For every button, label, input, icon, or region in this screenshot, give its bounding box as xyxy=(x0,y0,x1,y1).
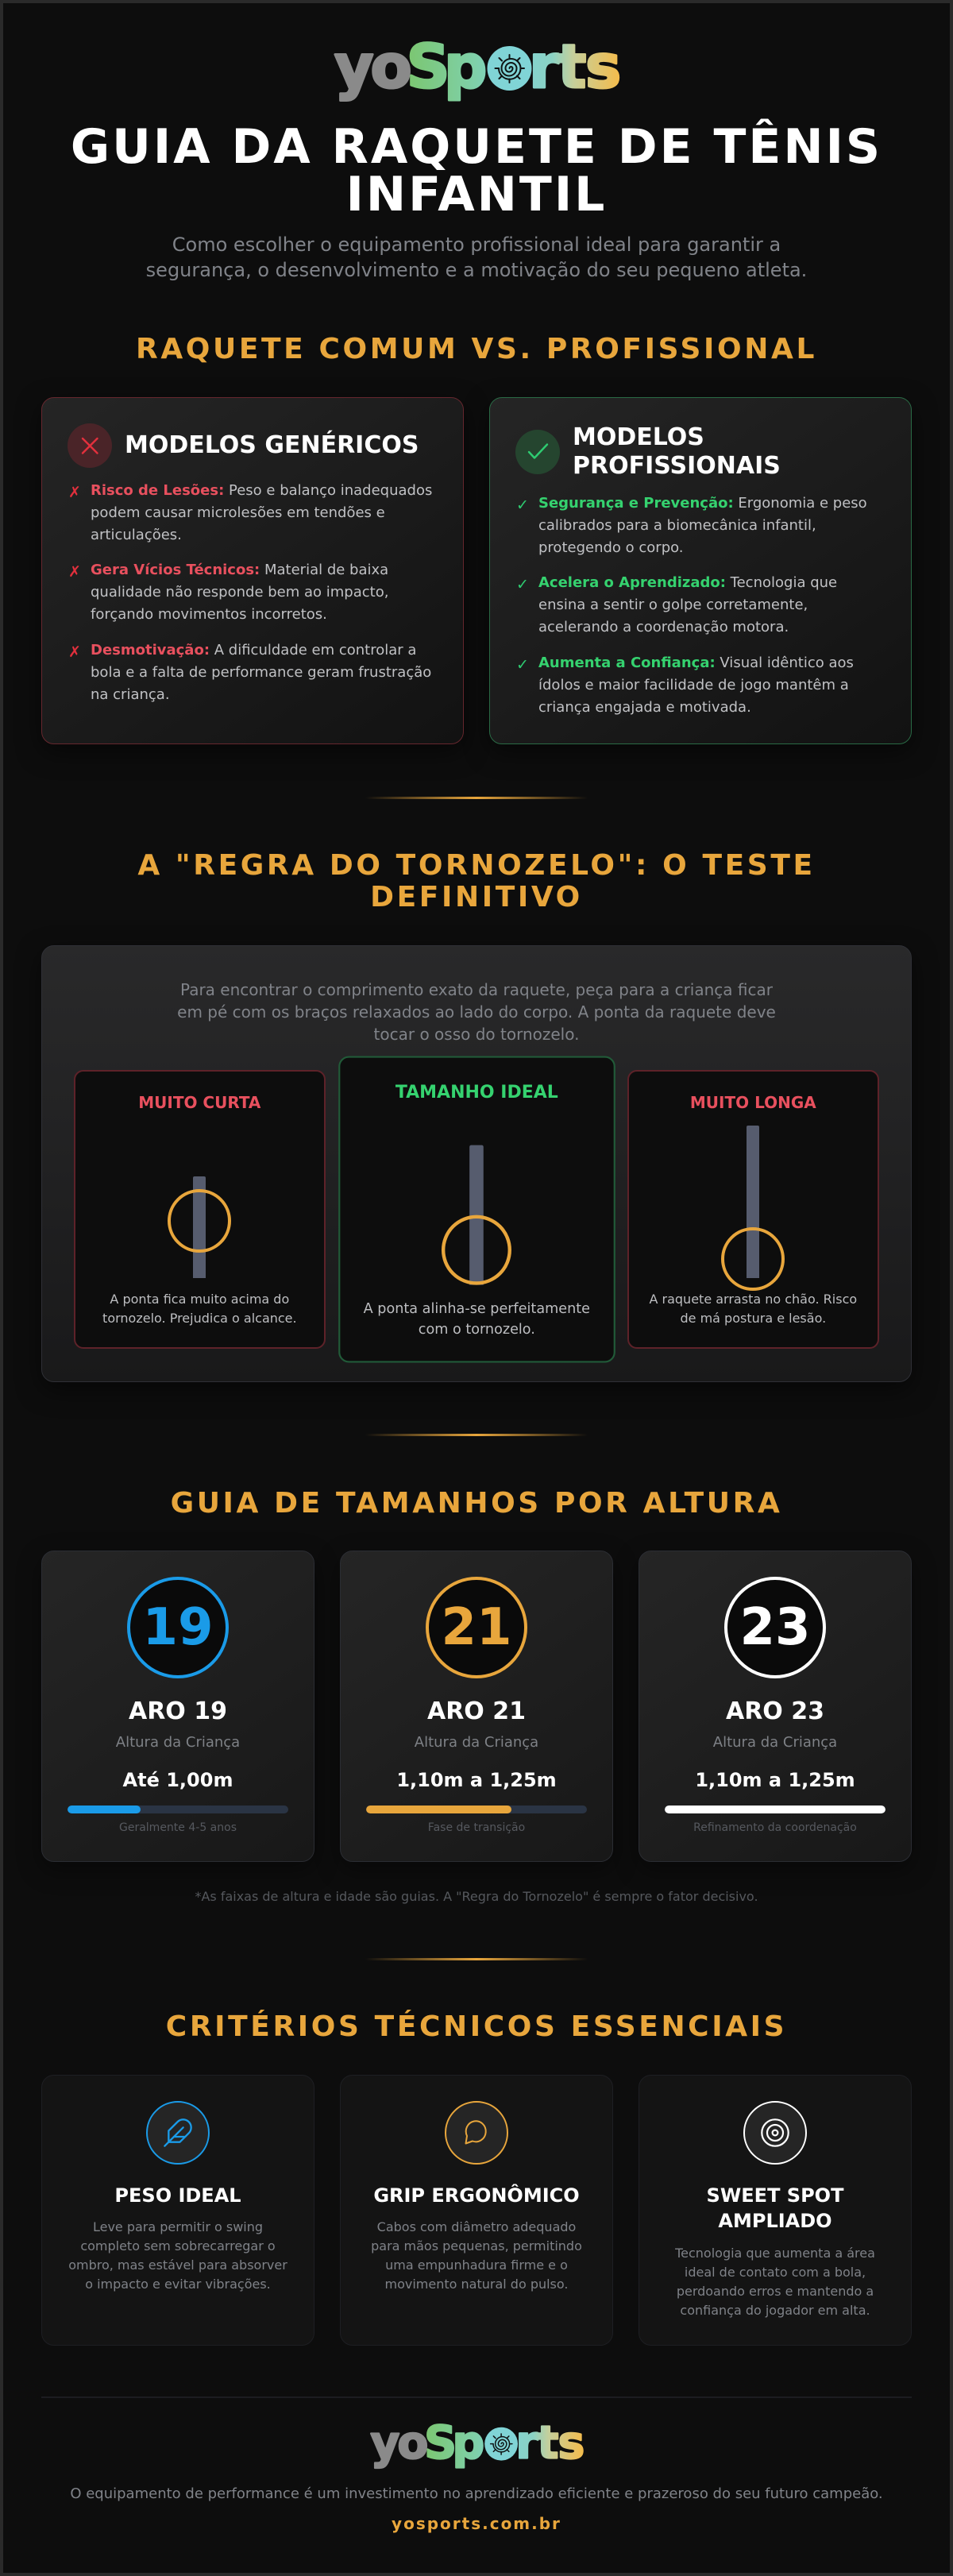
label: tamanho ideal: TAMANHO IDEAL xyxy=(395,1081,558,1102)
icon: red cross xyxy=(68,423,112,468)
heading: modelos profissionais: MODELOS xyxy=(573,423,704,451)
list: generic risks: Risco de Lesões: Peso e balanço inadequados xyxy=(91,482,432,499)
text: grip ergonômico xyxy=(371,2219,582,2292)
list: generic risks: ✗ xyxy=(68,563,81,581)
subtitle: Como escolher o equipamento profissional ideal para garantir a xyxy=(172,234,781,256)
note: coordination: Refinamento da coordenação xyxy=(693,1821,857,1833)
text: peso ideal xyxy=(68,2219,287,2292)
label: muito curta: MUITO CURTA xyxy=(138,1093,260,1112)
description: long xyxy=(649,1292,857,1326)
list: generic risks: articulações. xyxy=(91,527,182,543)
list: professional benefits: acelerando a coordenação motora. xyxy=(538,619,789,635)
list: professional benefits: Segurança e Prevenção: Ergonomia e peso xyxy=(538,495,867,512)
icon: green check xyxy=(515,430,560,474)
label: muito longa: MUITO LONGA xyxy=(690,1093,816,1112)
list: professional benefits: calibrados para a biomecânica infantil, xyxy=(538,517,816,534)
text: sweet spot: confiança do jogador em alta. xyxy=(680,2303,870,2318)
value: height: 1,10m a 1,25m xyxy=(695,1769,855,1791)
list: generic risks: Gera Vícios Técnicos: Material de baixa xyxy=(91,562,388,578)
footer text: O equipamento de performance é um investimento no aprendizado eficiente e prazeroso do seu futuro campeão. xyxy=(70,2485,883,2502)
label: altura: Altura da Criança xyxy=(713,1734,837,1751)
text: grip ergonômico: movimento natural do pulso. xyxy=(384,2277,568,2292)
title: INFANTIL xyxy=(346,167,607,222)
text: peso ideal: o impacto e evitar vibrações. xyxy=(85,2277,271,2292)
list: generic risks: bola e a falta de performance geram frustração xyxy=(91,664,431,681)
name: aro 23: ARO 23 xyxy=(726,1697,824,1725)
list: professional benefits: protegendo o corpo. xyxy=(538,539,684,556)
badge: 23 xyxy=(724,1577,826,1678)
list: professional benefits: ídolos e maior facilidade de jogo mantêm a xyxy=(538,677,849,693)
progress bar: 21 xyxy=(366,1806,587,1813)
text: sweet spot: Tecnologia que aumenta a área xyxy=(675,2246,875,2261)
badge: 21: 21 xyxy=(441,1598,512,1657)
heading: modelos profissionais: PROFISSIONAIS xyxy=(573,451,781,480)
text: ankle rule instructions: tocar o osso do tornozelo. xyxy=(374,1025,579,1044)
panel: regra do tornozelo xyxy=(41,945,912,1382)
icon: speech bubble xyxy=(445,2101,508,2165)
heading: raquete comum vs profissional: RAQUETE COMUM VS. PROFISSIONAL xyxy=(136,332,817,365)
note: age: Geralmente 4-5 anos xyxy=(119,1821,237,1833)
subtitle: segurança, o desenvolvimento e a motivação do seu pequeno atleta. xyxy=(146,259,807,281)
heading: peso ideal: PESO IDEAL xyxy=(114,2184,241,2207)
panel: modelos profissionais xyxy=(489,397,912,744)
description: ideal: com o tornozelo. xyxy=(418,1321,534,1338)
value: height: 1,10m a 1,25m xyxy=(396,1769,557,1791)
racket bar: ideal xyxy=(469,1145,484,1285)
description: long: de má postura e lesão. xyxy=(680,1311,826,1326)
card: peso ideal xyxy=(41,2075,314,2346)
footnote: *As faixas de altura e idade são guias. A "Regra do Tornozelo" é sempre o fator decisivo. xyxy=(195,1889,758,1904)
heading: sweet spot ampliado xyxy=(707,2184,843,2232)
list: generic risks: qualidade não responde bem ao impacto, xyxy=(91,584,388,601)
list: professional benefits xyxy=(516,495,867,716)
text: sweet spot xyxy=(675,2246,875,2318)
text: grip ergonômico: Cabos com diâmetro adequado xyxy=(377,2219,576,2234)
text: peso ideal: ombro, mas estável para absorver xyxy=(68,2257,287,2273)
progress bar: 23 xyxy=(665,1806,885,1813)
description: short: tornozelo. Prejudica o alcance. xyxy=(102,1311,297,1326)
card: sweet spot ampliado xyxy=(639,2075,912,2346)
list: generic risks xyxy=(68,482,432,703)
text: ankle rule instructions: em pé com os braços relaxados ao lado do corpo. A ponta da raquete deve xyxy=(177,1002,776,1022)
icon: target xyxy=(743,2101,807,2165)
list: generic risks: na criança. xyxy=(91,686,170,703)
ankle ring: long xyxy=(721,1227,785,1291)
badge: 19 xyxy=(127,1577,229,1678)
text: sweet spot: perdoando erros e mantendo a xyxy=(677,2284,874,2299)
list: generic risks: ✗ xyxy=(68,643,81,661)
heading: sweet spot ampliado: SWEET SPOT xyxy=(707,2184,843,2207)
text: sweet spot: ideal de contato com a bola, xyxy=(685,2265,866,2280)
list: professional benefits: ✓ xyxy=(516,496,529,514)
text: peso ideal: completo sem sobrecarregar o xyxy=(80,2238,276,2254)
heading: modelos profissionais xyxy=(573,423,781,480)
note: phase: Fase de transição xyxy=(428,1821,525,1833)
icon: feather xyxy=(146,2101,210,2165)
racket bar: long xyxy=(747,1126,759,1278)
value: height: Até 1,00m xyxy=(123,1769,233,1791)
heading: regra do tornozelo: A "REGRA DO TORNOZELO": O TESTE xyxy=(137,848,816,882)
title xyxy=(71,119,882,222)
heading: modelos genéricos: MODELOS GENÉRICOS xyxy=(125,431,419,459)
heading: grip ergonômico: GRIP ERGONÔMICO xyxy=(373,2184,580,2207)
badge: 21 xyxy=(426,1577,527,1678)
description: short xyxy=(102,1292,297,1326)
text: ankle rule instructions: Para encontrar o comprimento exato da raquete, peça para a criança ficar xyxy=(180,980,773,999)
description: long: A raquete arrasta no chão. Risco xyxy=(649,1292,857,1307)
footer url: yosports.com.br xyxy=(392,2514,561,2533)
card: aro 21 xyxy=(340,1551,613,1862)
card: aro 19 xyxy=(41,1551,314,1862)
label: altura: Altura da Criança xyxy=(415,1734,538,1751)
ankle ring: ideal xyxy=(442,1215,511,1285)
heading: guia de tamanhos: GUIA DE TAMANHOS POR ALTURA xyxy=(171,1487,782,1519)
name: aro 21: ARO 21 xyxy=(427,1697,526,1725)
list: professional benefits: Aumenta a Confiança: Visual idêntico aos xyxy=(538,655,854,671)
ankle ring: short xyxy=(168,1189,231,1253)
list: generic risks: podem causar microlesões em tendões e xyxy=(91,504,385,521)
list: professional benefits: criança engajada e motivada. xyxy=(538,699,751,716)
card: grip ergonômico xyxy=(340,2075,613,2346)
heading: sweet spot ampliado: AMPLIADO xyxy=(718,2210,832,2232)
name: aro 19: ARO 19 xyxy=(129,1697,227,1725)
badge: 23: 23 xyxy=(739,1598,811,1657)
subtitle xyxy=(146,234,807,281)
logo: yoSports header xyxy=(334,36,621,102)
text: grip ergonômico: para mãos pequenas, permitindo xyxy=(371,2238,582,2254)
card: muito curta xyxy=(74,1070,326,1349)
description: short: A ponta fica muito acima do xyxy=(110,1292,289,1307)
description: ideal: A ponta alinha-se perfeitamente xyxy=(363,1300,589,1316)
text: grip ergonômico: uma empunhadura firme e o xyxy=(385,2257,568,2273)
heading: regra do tornozelo: DEFINITIVO xyxy=(370,880,583,913)
card: aro 23 xyxy=(639,1551,912,1862)
panel: modelos genéricos xyxy=(41,397,464,744)
list: professional benefits: ✓ xyxy=(516,576,529,593)
label: altura: Altura da Criança xyxy=(116,1734,240,1751)
text: ankle rule instructions xyxy=(177,980,776,1044)
logo: yoSports footer xyxy=(370,2420,585,2469)
list: generic risks: Desmotivação: A dificuldade em controlar a xyxy=(91,642,416,658)
list: generic risks: ✗ xyxy=(68,484,81,501)
list: generic risks: forçando movimentos incorretos. xyxy=(91,606,327,623)
list: professional benefits: Acelera o Aprendizado: Tecnologia que xyxy=(538,574,837,591)
list: professional benefits: ensina a sentir o golpe corretamente, xyxy=(538,597,808,613)
badge: 19: 19 xyxy=(142,1598,214,1657)
list: professional benefits: ✓ xyxy=(516,656,529,674)
text: peso ideal: Leve para permitir o swing xyxy=(93,2219,263,2234)
card: muito longa xyxy=(627,1070,879,1349)
title: GUIA DA RAQUETE DE TÊNIS xyxy=(71,119,882,175)
racket bar: short xyxy=(193,1176,206,1278)
heading: regra do tornozelo xyxy=(137,848,816,913)
heading: critérios técnicos: CRITÉRIOS TÉCNICOS ESSENCIAIS xyxy=(166,2010,787,2043)
progress bar: 19 xyxy=(68,1806,288,1813)
description: ideal xyxy=(363,1300,589,1338)
card: tamanho ideal xyxy=(338,1056,615,1363)
